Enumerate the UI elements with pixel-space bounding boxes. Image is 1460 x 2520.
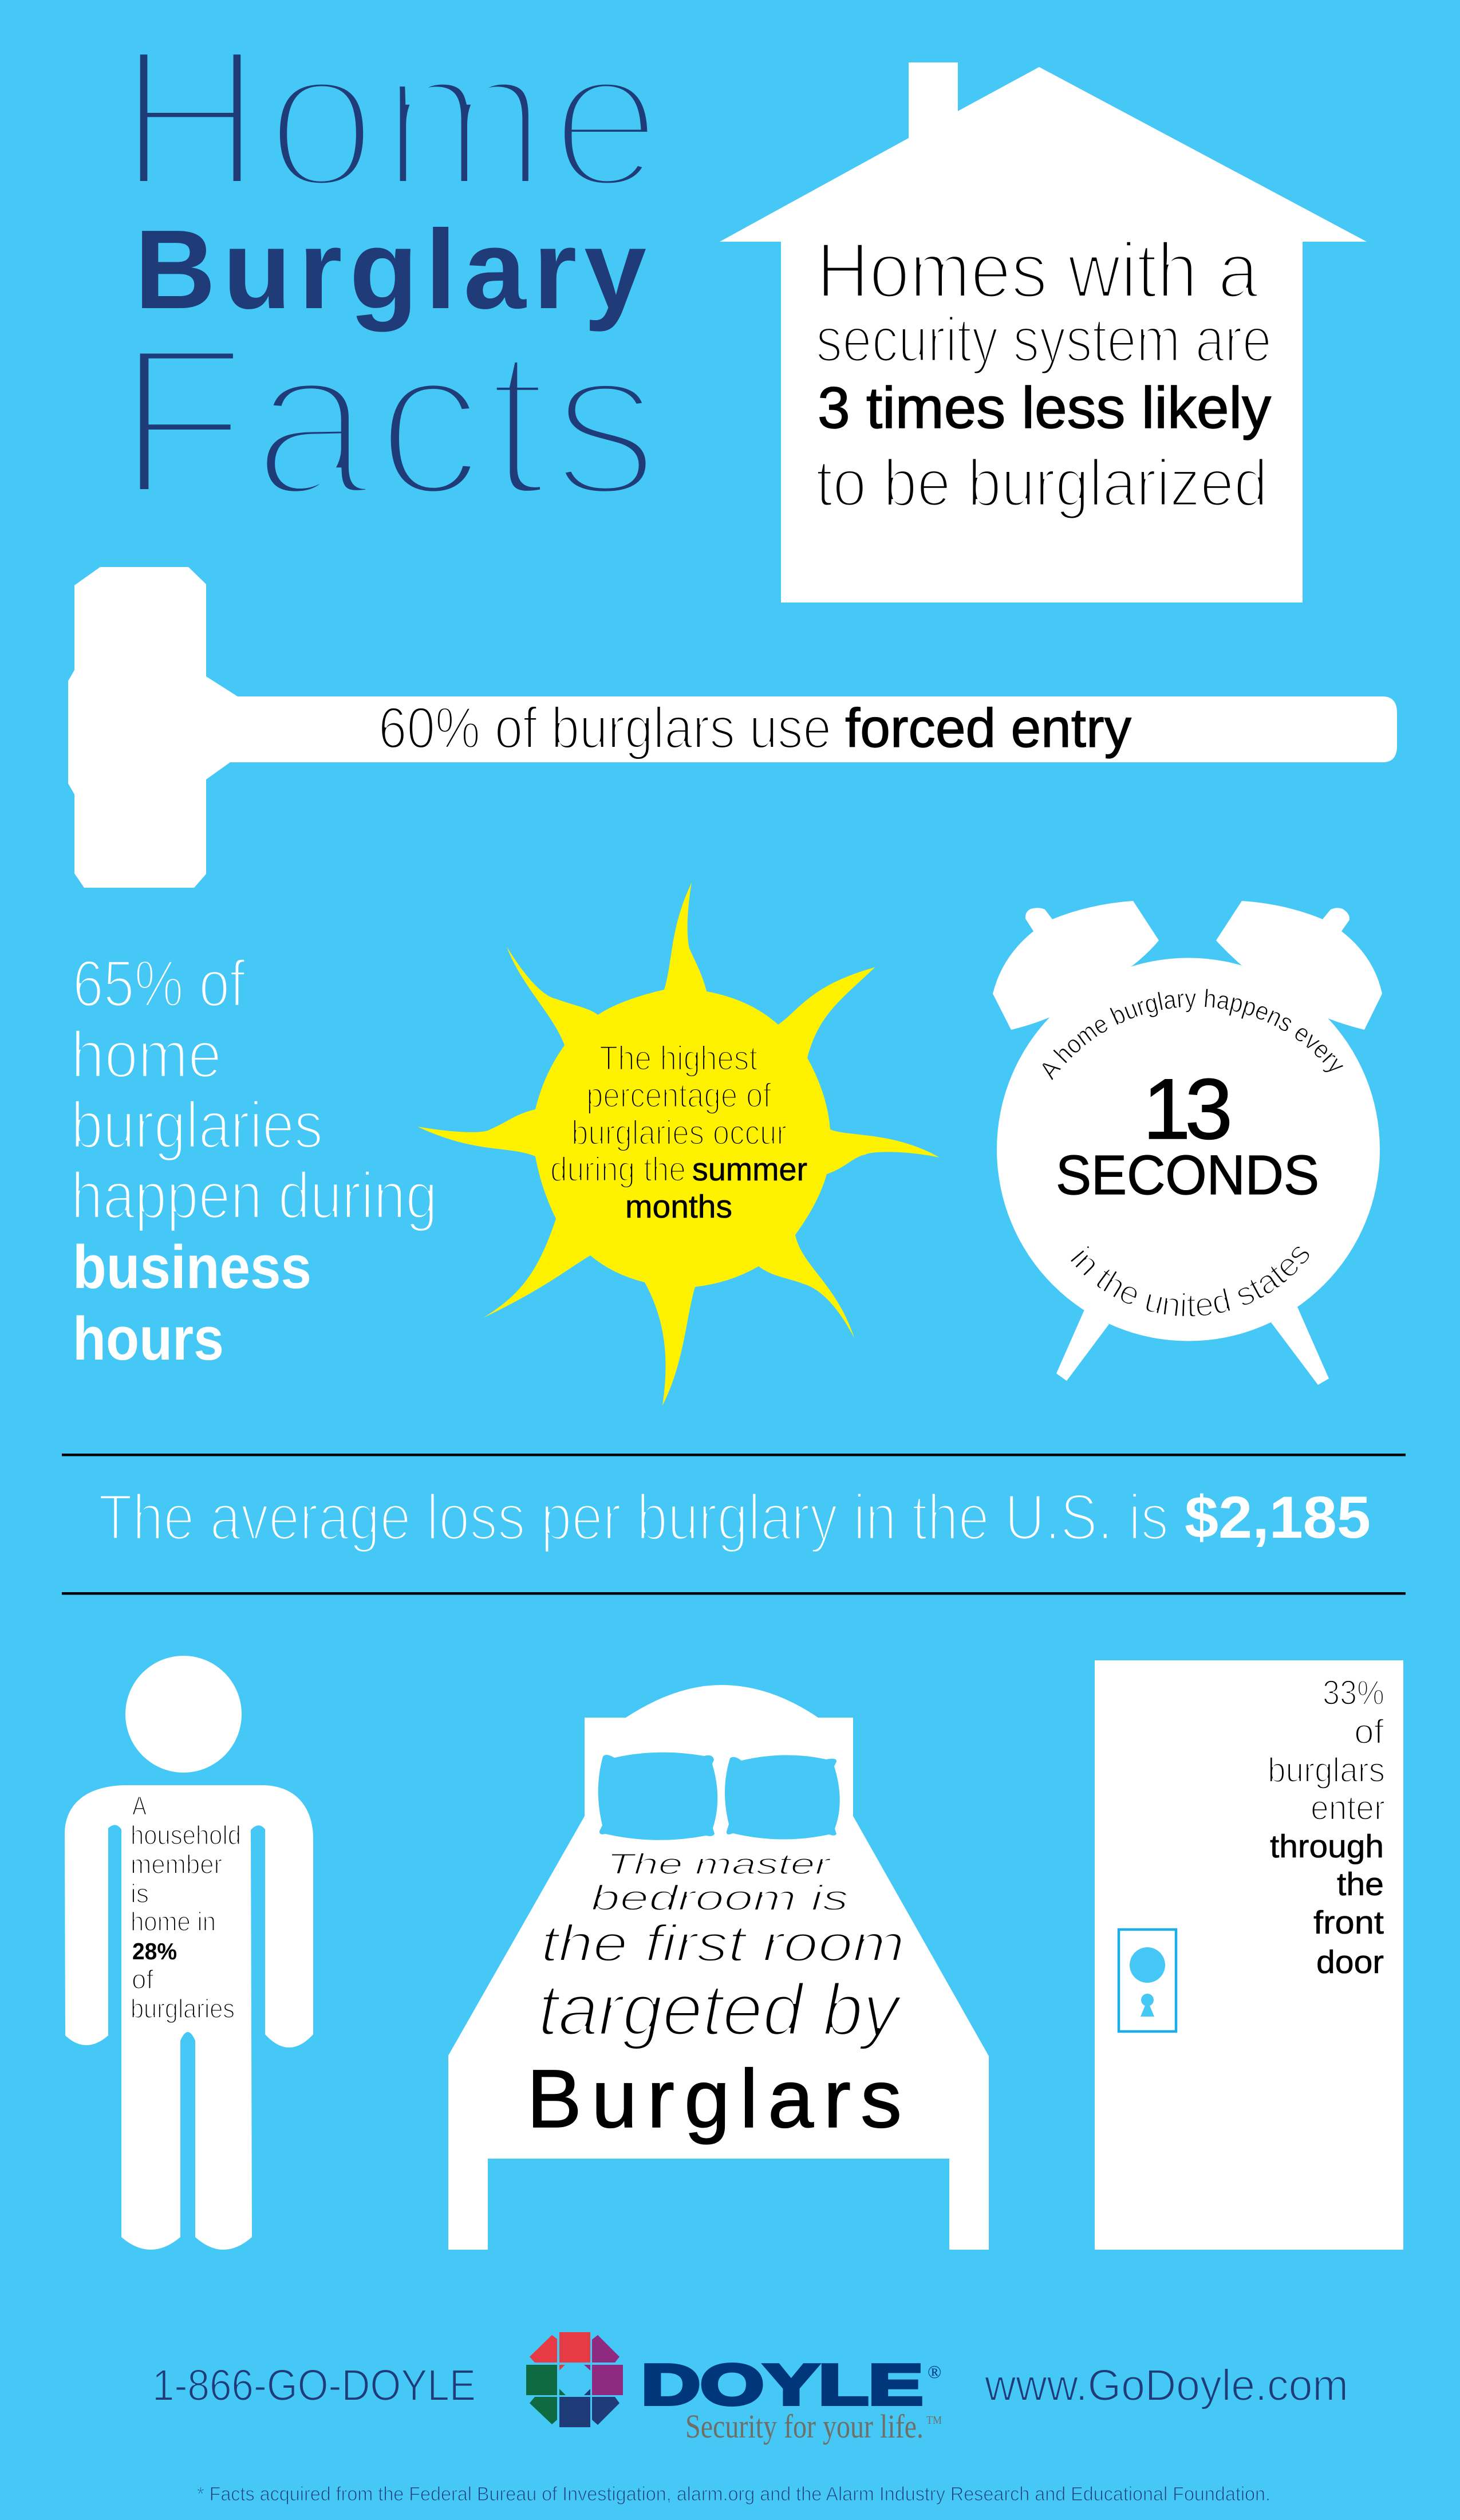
divider top [62,1454,1406,1456]
person text: 28% [132,1938,177,1964]
hammer text light: 60% of burglars use [378,695,831,761]
person text: member [131,1849,222,1879]
curved text top: A home burglary happens every [1042,989,1343,1080]
logo wordmark: DOYLE [641,2353,923,2417]
text block: business hours fact: 65% of [73,947,246,1021]
sun text: summer [692,1151,807,1188]
icon: house silhouette [720,62,1367,603]
curved text bottom: in the united states [1071,1246,1309,1316]
panel: sun summer fact [417,883,940,1405]
house text line 2: security system are [816,305,1272,375]
text block: business hours fact [71,947,437,1373]
text block: business hours fact: home [71,1018,222,1092]
door text: through [1270,1828,1384,1865]
title [117,6,662,541]
icon: sledgehammer [68,567,1397,888]
person text: is [131,1879,149,1908]
title line: Burglary: Burglary [135,207,646,332]
panel: hammer forced entry fact [68,567,1397,888]
panel: alarm clock 13 seconds fact [993,901,1382,1385]
bed text: targeted by [538,1969,903,2051]
door text: front [1313,1904,1384,1941]
door text: burglars [1268,1751,1385,1789]
hammer text emphasis: forced entry [845,698,1131,759]
text block: business hours fact: business [73,1233,311,1301]
bed text: bedroom is [591,1879,849,1918]
number 13: 13 [1143,1061,1233,1157]
logo mark [526,2332,623,2427]
person text: household [131,1820,241,1850]
bed text [527,1848,905,2145]
footnote: * Facts acquired from the Federal Bureau of Investigation, alarm.org and the Alarm Industry Research and Educational Foundation. [197,2483,1270,2505]
logo tagline: Security for your life. [685,2408,924,2445]
text block: business hours fact: hours [73,1304,224,1373]
icon: bed [448,1685,989,2250]
bed text: The master [607,1848,831,1880]
icon: door lock plate [1119,1930,1176,2031]
person text [131,1791,241,2023]
logo: Doyle [526,2332,942,2445]
title line: Home: Home [118,6,662,230]
bed text: Burglars [527,2053,902,2145]
text block: business hours fact: happen during [71,1159,437,1233]
person text: A [132,1791,147,1821]
bed text: the first room [541,1915,905,1972]
door text: of [1354,1712,1384,1751]
title line: Facts: Facts [117,302,659,541]
panel: front door fact [1095,1660,1403,2250]
person text: home in [131,1907,216,1936]
house text line 4: to be burglarized [816,446,1268,520]
house text line 3 emphasis: 3 times less likely [818,375,1271,440]
word SECONDS: SECONDS [1056,1144,1319,1206]
person text: burglaries [131,1994,235,2023]
icon: left pillow [598,1753,717,1840]
trademark: TM [926,2414,942,2427]
door text: door [1316,1944,1384,1980]
sun text: during the [550,1150,686,1188]
house text line 1: Homes with a [816,227,1259,314]
icon: door [1095,1660,1403,2250]
text block: business hours fact: burglaries [71,1089,323,1162]
sun text: The highest [599,1039,757,1077]
sun text: burglaries occur [571,1113,787,1152]
average loss statement: The average loss per burglary in the U.S. is [98,1481,1169,1553]
panel: household member fact [65,1656,313,2250]
icon: alarm clock [993,901,1382,1385]
sun text: percentage of [586,1076,771,1115]
person text: of [132,1964,153,1994]
footer [152,2332,1348,2505]
icon: sun [417,883,940,1405]
door text [1268,1674,1385,1980]
panel: house security system fact [720,62,1367,603]
sun text [550,1039,807,1225]
door text: 33% [1323,1674,1384,1712]
divider bottom [62,1592,1406,1594]
door text: enter [1311,1789,1385,1827]
phone number: 1-866-GO-DOYLE [152,2361,476,2410]
panel: master bedroom fact [448,1685,989,2250]
average loss statement: $2,185 [1185,1485,1371,1551]
door text: the [1337,1866,1384,1903]
icon: right pillow [725,1755,840,1840]
website: www.GoDoyle.com [984,2361,1348,2410]
sun text: months [625,1188,732,1225]
icon: person [65,1656,313,2250]
registered mark: ® [928,2361,941,2382]
